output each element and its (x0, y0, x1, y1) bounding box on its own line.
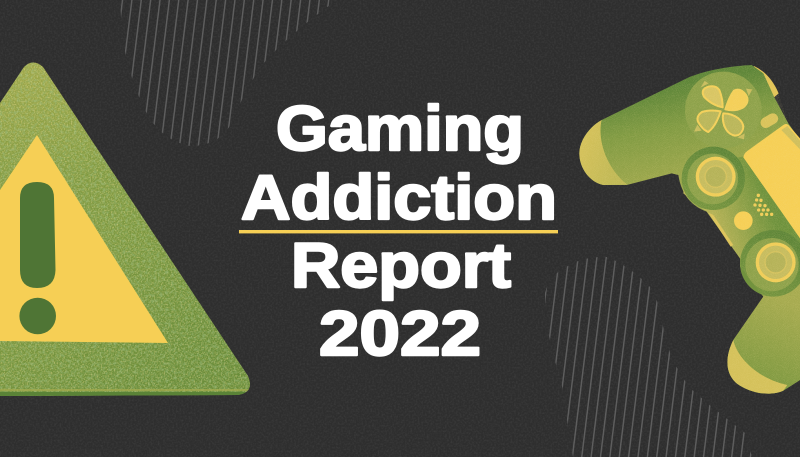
left grip tip (579, 120, 627, 185)
d-pad up-right (725, 90, 747, 110)
lower edge highlight (708, 213, 733, 247)
right stick cap centre (765, 252, 786, 273)
d-pad up-left (703, 86, 723, 107)
shoulder button (752, 66, 779, 97)
right thumbstick (740, 230, 800, 297)
centre strip (683, 157, 800, 295)
d-pad arrows (694, 81, 752, 139)
options button (759, 111, 780, 130)
speaker dots (753, 194, 773, 216)
icon: warning triangle (0, 55, 256, 400)
ps button (734, 211, 753, 230)
title (241, 94, 557, 369)
left stick cap (696, 157, 736, 197)
hatched blob: top (120, 0, 335, 146)
lower grip tip (727, 340, 787, 394)
touchpad shading (781, 126, 800, 149)
title line: Gaming: Gaming (276, 94, 524, 164)
triangle texture (0, 55, 256, 400)
hatched blob: bottom (545, 257, 752, 457)
right stick cap inner (759, 246, 792, 279)
controller body (579, 65, 800, 394)
left stick ring (687, 154, 738, 204)
touchpad (743, 124, 800, 238)
left thumbstick (682, 147, 745, 210)
right stick cap (756, 242, 796, 282)
d-pad buttons (697, 86, 747, 136)
left stick cap inner (699, 160, 732, 193)
title underline (239, 230, 558, 233)
exclamation dot (19, 298, 56, 334)
left stick well (682, 147, 745, 210)
triangle yellow centre (0, 135, 168, 343)
title line: Report: Report (291, 231, 511, 301)
d-pad down-right (723, 113, 743, 136)
title line: 2022: 2022 (319, 299, 481, 369)
right stick ring (745, 238, 799, 291)
d-pad well (685, 72, 762, 148)
exclamation bar (20, 182, 56, 288)
lower grip (727, 280, 800, 394)
controller texture (577, 63, 800, 397)
triangle outer plate (0, 62, 250, 396)
icon: game controller (577, 63, 800, 397)
d-pad down-left (697, 110, 721, 132)
left stick cap centre (705, 166, 726, 187)
title line: Addiction: Addiction (241, 163, 557, 233)
right stick well (740, 230, 800, 297)
